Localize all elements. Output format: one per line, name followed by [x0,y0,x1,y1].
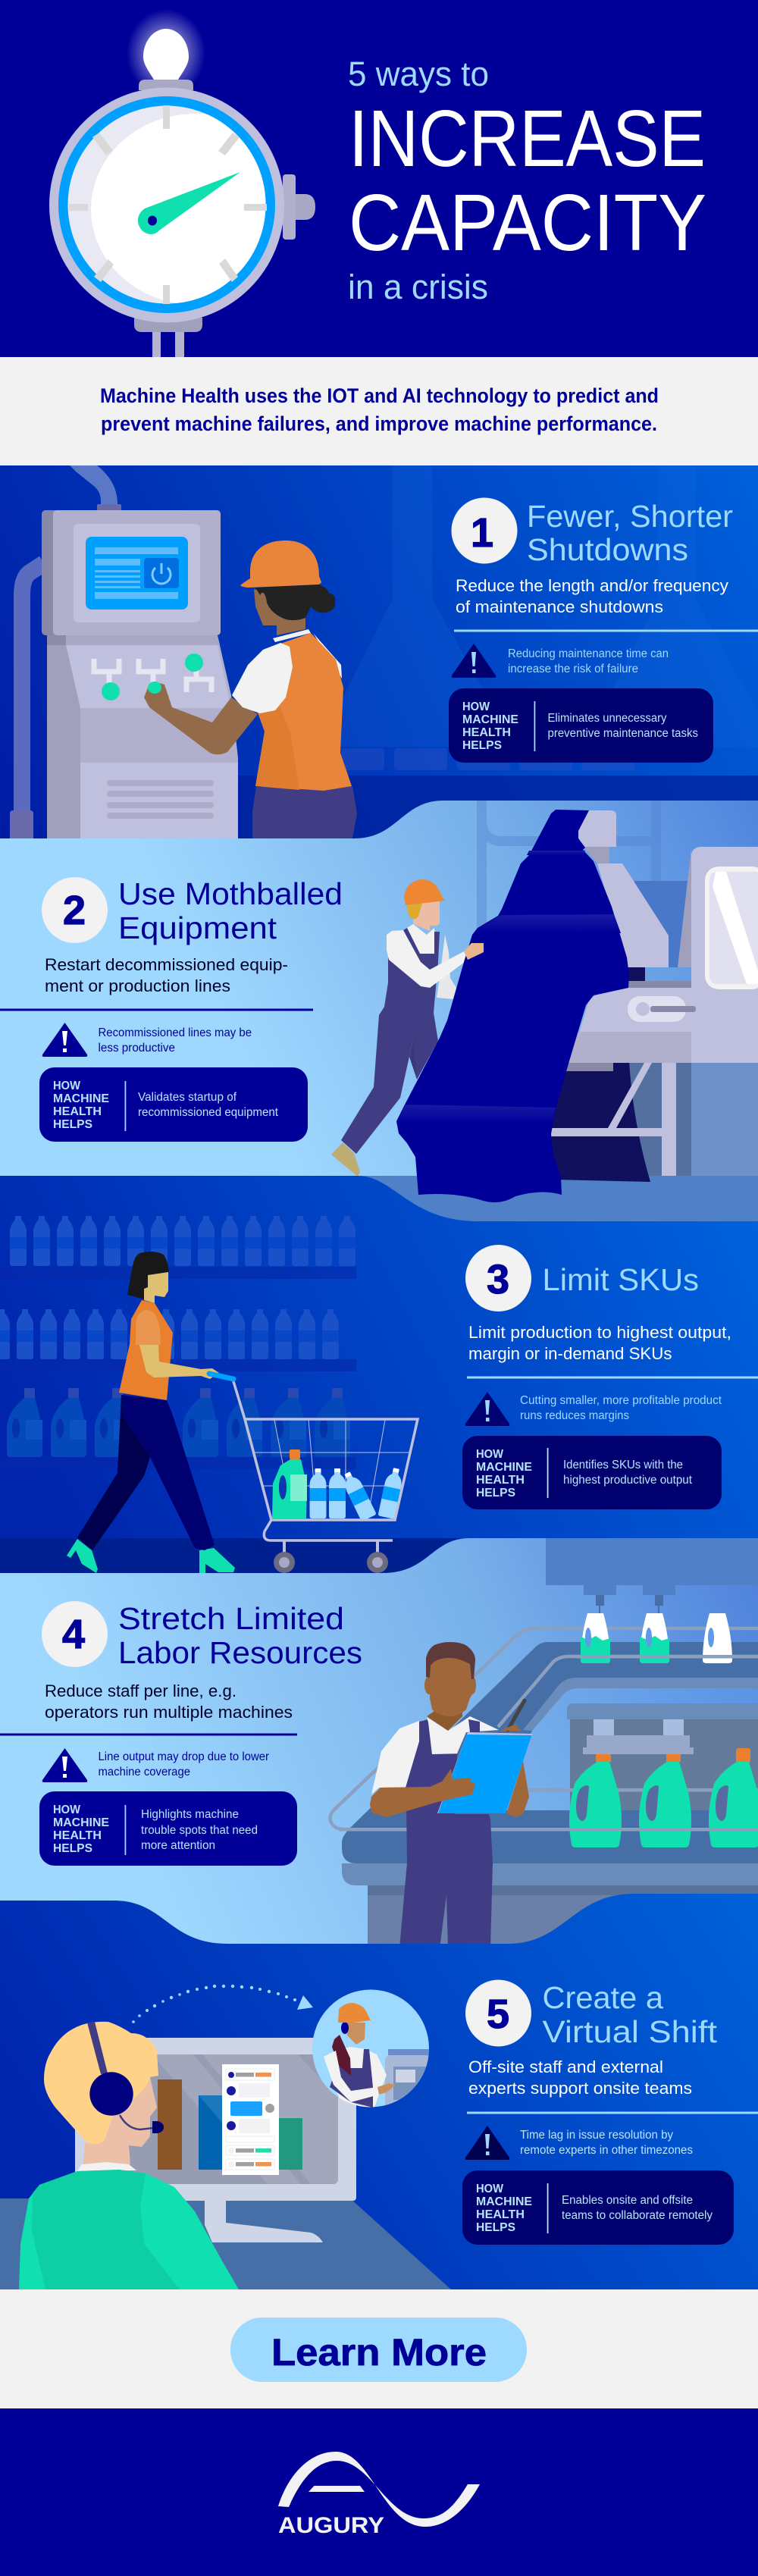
illustration: fabric roll [396,810,629,1202]
callout: how machine health helps: Identifies SKUs with the [563,1459,683,1471]
heading: Labor Resources [118,1635,362,1670]
title: 5 ways to [348,55,489,93]
title: CAPACITY [349,178,706,268]
illustration: worker hand on fabric [464,943,484,960]
callout: how machine health helps: Enables onsite and offsite [562,2194,693,2207]
description: of maintenance shutdowns [456,597,663,616]
icon: stopwatch [49,9,315,357]
warning text [99,1750,269,1778]
description: ment or production lines [45,976,230,995]
warning text: Line output may drop due to lower [99,1750,269,1763]
callout: how machine health helps: HOW [462,700,490,713]
callout: how machine health helps: Highlights machine [141,1808,239,1821]
description: Restart decommissioned equip- [45,955,288,974]
description [468,2057,692,2098]
heading: Use Mothballed [118,876,343,911]
illustration: factory walls [349,801,758,1228]
description: experts support onsite teams [468,2079,692,2098]
heading: Stretch Limited [118,1601,344,1636]
heading [118,1601,362,1670]
footer [0,2408,758,2576]
icon: warning triangle [42,1748,87,1782]
warning text [520,1394,722,1422]
number badge 1 [452,497,517,564]
callout: how machine health helps [462,1436,722,1509]
illustration: bottling line [330,1538,758,1948]
warning text: Cutting smaller, more profitable product [520,1394,722,1407]
intro band: Machine Health uses the IOT and AI technology to predict and [100,384,659,407]
illustration: fabric machine [565,810,758,1063]
illustration: worker with overalls [331,879,468,1177]
warning text [520,2129,693,2157]
icon: warning triangle [465,2126,509,2160]
warning text: Recommissioned lines may be [99,1026,252,1039]
description [45,1681,293,1722]
heading: Virtual Shift [543,2014,718,2049]
warning text [99,1026,252,1055]
heading [543,1980,718,2049]
illustration: shopper [67,1252,235,1573]
intro band [0,357,758,465]
heading: Create a [543,1980,663,2015]
callout: how machine health helps [462,2170,734,2245]
icon: warning triangle [465,1392,509,1426]
description: Reduce the length and/or frequency [456,576,728,595]
callout: how machine health helps: HELPS [476,2221,515,2234]
number badge 5 [465,1980,531,2047]
warning text: less productive [99,1042,175,1055]
illustration: shopping cart [209,1374,418,1573]
callout: how machine health helps: HOW [476,1448,503,1461]
heading [118,876,343,945]
number badge 3: 3 [487,1257,509,1302]
description: Limit production to highest output, [468,1323,731,1342]
illustration: store shelves [0,1216,469,1573]
callout: how machine health helps: HEALTH [53,1105,102,1118]
panel: use mothballed equipment [0,801,758,1228]
illustration: monitor with dashboard [75,2038,356,2242]
callout: how machine health helps: MACHINE [53,1092,109,1105]
heading: Equipment [118,910,277,945]
description: Off-site staff and external [468,2057,663,2076]
warning text [508,647,669,675]
title: INCREASE [349,94,706,183]
warning text: machine coverage [99,1766,190,1778]
callout: how machine health helps: trouble spots that need [141,1824,258,1837]
panel: stretch limited labor resources [0,1538,758,1948]
illustration: desk [0,2198,451,2289]
callout: how machine health helps: HEALTH [476,1474,525,1487]
panel: limit SKUs [0,1176,758,1577]
callout: how machine health helps [449,688,713,763]
illustration: remote worker in circle [312,1989,431,2111]
callout: how machine health helps [39,1067,308,1142]
heading: Limit SKUs [543,1262,699,1297]
callout: how machine health helps: preventive maintenance tasks [547,727,698,740]
title [348,55,706,306]
illustration: operator in hard hat [144,541,357,838]
number badge 4: 4 [62,1612,85,1657]
callout: how machine health helps: HOW [476,2183,503,2195]
heading: Shutdowns [527,532,688,567]
warning text: runs reduces margins [520,1409,629,1422]
button: learn more: Learn More [271,2331,487,2374]
description [456,576,728,616]
callout: how machine health helps: Eliminates unnecessary [547,712,667,725]
illustration: supervisor with clipboard [370,1642,532,1948]
number badge 4 [42,1601,108,1667]
description: Reduce staff per line, e.g. [45,1681,236,1700]
number badge 2 [42,877,108,943]
callout: how machine health helps: MACHINE [53,1816,109,1829]
title: in a crisis [348,268,488,306]
icon: warning triangle [42,1023,87,1057]
hero background [0,0,758,357]
callout: how machine health helps: HEALTH [462,726,511,739]
callout: how machine health helps: HOW [53,1804,80,1816]
callout: how machine health helps: HEALTH [476,2208,525,2221]
number badge 5: 5 [487,1992,509,2037]
panel: fewer shorter shutdowns [0,465,758,845]
logo: augury: AUGURY [278,2513,384,2538]
illustration: technician with headset [19,2022,239,2289]
call to action band [0,2289,758,2408]
callout: how machine health helps: more attention [141,1839,215,1852]
intro band: prevent machine failures, and improve machine performance. [101,412,657,435]
warning text: Reducing maintenance time can [508,647,669,660]
icon: warning triangle [452,644,496,678]
callout: how machine health helps: HELPS [53,1842,92,1855]
panel: create a virtual shift [0,1894,758,2289]
description: margin or in-demand SKUs [468,1344,672,1363]
illustration: control machine [10,465,238,838]
callout: how machine health helps: HELPS [462,739,502,752]
callout: how machine health helps: HELPS [53,1118,92,1131]
callout: how machine health helps: HOW [53,1080,80,1092]
number badge 1: 1 [471,510,493,556]
callout: how machine health helps [39,1791,297,1866]
logo: augury [278,2452,480,2538]
callout: how machine health helps: MACHINE [476,2195,532,2208]
callout: how machine health helps: Validates startup of [138,1091,237,1104]
callout: how machine health helps: teams to collaborate remotely [562,2209,713,2222]
description: operators run multiple machines [45,1703,293,1722]
warning text: increase the risk of failure [508,663,638,675]
arrow: dotted connection [132,1985,313,2023]
callout: how machine health helps: MACHINE [462,713,518,726]
warning text: Time lag in issue resolution by [520,2129,673,2142]
callout: how machine health helps: HELPS [476,1487,515,1500]
number badge 2: 2 [63,888,86,933]
warning text: remote experts in other timezones [520,2144,693,2157]
heading [527,499,733,567]
callout: how machine health helps: recommissioned equipment [138,1106,279,1119]
description [45,955,288,995]
button: learn more [230,2317,527,2382]
number badge 3 [465,1245,531,1312]
callout: how machine health helps: MACHINE [476,1461,532,1474]
heading: Fewer, Shorter [527,499,733,534]
callout: how machine health helps: highest productive output [563,1474,693,1487]
description [468,1323,731,1363]
callout: how machine health helps: HEALTH [53,1829,102,1842]
